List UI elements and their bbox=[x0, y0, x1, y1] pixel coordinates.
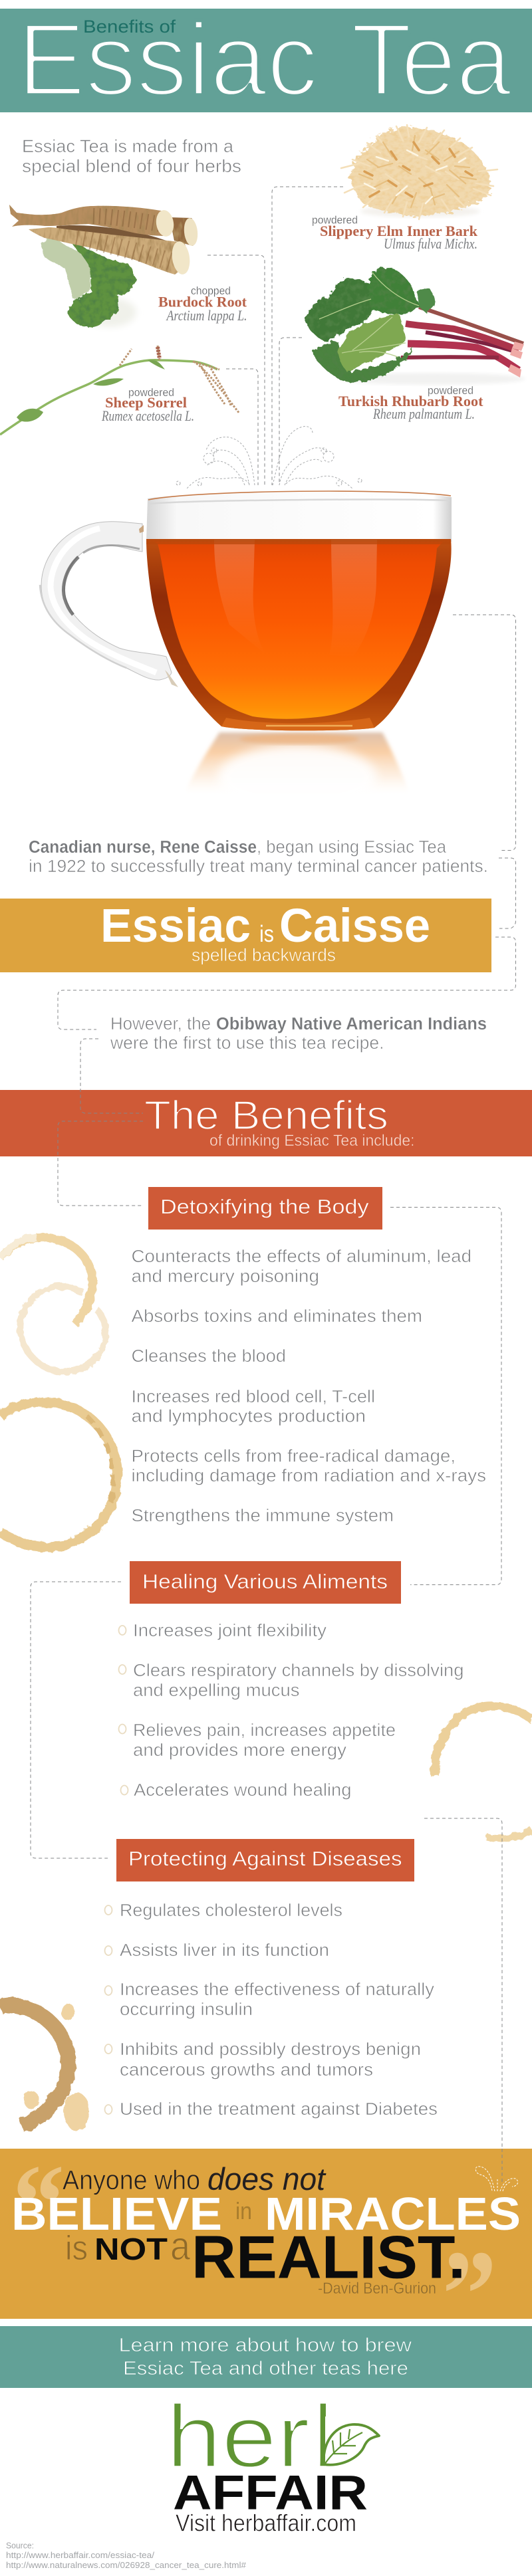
list: protecting benefits: Increases the effectiveness of naturally bbox=[120, 1981, 434, 1999]
list: protecting benefits: cancerous growths and tumors bbox=[120, 2061, 373, 2080]
icon: shredded bark pile bbox=[341, 125, 497, 219]
heading: The Benefits: The Benefits bbox=[144, 1093, 388, 1138]
logo word: herb: her bbox=[166, 2387, 310, 2486]
label: Burdock Root: Burdock Root bbox=[158, 294, 247, 310]
list: detoxifying benefits: including damage from radiation and x-rays bbox=[132, 1467, 486, 1485]
panel: learn more banner: Essiac Tea and other teas here bbox=[123, 2358, 408, 2379]
section heading: Protecting Against Diseases bbox=[116, 1839, 414, 1881]
panel: Essiac is Caisse banner bbox=[0, 899, 491, 972]
connector: protecting to quote banner bbox=[424, 1818, 502, 2184]
heading: Essiac is Caisse: Essiac bbox=[100, 900, 251, 952]
icon: sorrel stem bbox=[0, 346, 239, 435]
tea highlights bbox=[214, 540, 266, 655]
label: Slippery Elm Inner Bark: powdered bbox=[312, 214, 358, 226]
panel: The Benefits banner bbox=[0, 1090, 532, 1156]
tea body bbox=[154, 542, 443, 719]
decoration: tea ring right bbox=[435, 1706, 532, 1839]
label: Slippery Elm Inner Bark: Slippery Elm Inner Bark bbox=[320, 223, 478, 239]
section heading: Detoxifying the Body: Detoxifying the Body bbox=[160, 1195, 369, 1218]
decoration: large tea ring bbox=[0, 1402, 117, 1547]
connector: cup to nurse text bbox=[453, 615, 516, 851]
text: visit herbaffair.com: Visit herbaffair.com bbox=[176, 2510, 356, 2536]
panel: learn more banner: Learn more about how to brew bbox=[118, 2335, 412, 2356]
panel: slippery elm bbox=[312, 125, 497, 252]
list: healing benefits: and expelling mucus bbox=[133, 1681, 299, 1700]
label: Sheep Sorrel: powdered bbox=[128, 386, 174, 399]
label: Turkish Rhubarb Root: Rheum palmantum L. bbox=[372, 405, 475, 422]
text block: Rene Caisse: in 1922 to successfully treat many terminal cancer patients. bbox=[29, 857, 488, 876]
panel: burdock root bbox=[9, 205, 247, 328]
decoration: tea rings top left bbox=[0, 1237, 106, 1372]
panel: title banner bbox=[0, 2, 532, 117]
logo icon: leaf bbox=[324, 2424, 379, 2465]
list: healing benefits: Accelerates wound healing bbox=[134, 1781, 351, 1800]
list: healing benefits: Clears respiratory channels by dissolving bbox=[133, 1662, 464, 1680]
connector: gold banner to Obibway text bbox=[58, 937, 516, 1029]
list: protecting benefits: occurring insulin bbox=[120, 2000, 253, 2019]
connector lines from herbs to cup bbox=[207, 187, 343, 485]
label: Sheep Sorrel bbox=[101, 386, 194, 424]
text block: intro: special blend of four herbs bbox=[22, 156, 241, 176]
logo: herb affair bbox=[166, 2387, 379, 2536]
quote text: Anyone who bbox=[63, 2165, 200, 2195]
reflection under cup bbox=[183, 732, 411, 796]
panel: turkish rhubarb bbox=[306, 267, 525, 422]
list: detoxifying benefits: Protects cells from free-radical damage, bbox=[132, 1448, 456, 1466]
list: detoxifying benefits: Cleanses the blood bbox=[132, 1347, 286, 1366]
text block: Obibway: However, the bbox=[110, 1015, 211, 1033]
cup handle bbox=[41, 522, 172, 680]
section heading: Detoxifying the Body bbox=[148, 1187, 382, 1230]
text block: Rene Caisse bbox=[29, 838, 488, 876]
text: spelled backwards: spelled backwards bbox=[192, 945, 336, 965]
list: protecting benefits: Inhibits and possibly destroys benign bbox=[120, 2040, 421, 2059]
text block: intro: Essiac Tea is made from a bbox=[22, 136, 233, 156]
connector: nurse text to gold banner bbox=[499, 858, 516, 928]
list: healing benefits: Relieves pain, increases appetite bbox=[133, 1721, 396, 1740]
list: detoxifying benefits: Strengthens the immune system bbox=[132, 1507, 394, 1525]
quote text: is bbox=[65, 2229, 88, 2268]
glass rim bbox=[146, 492, 452, 542]
list: healing benefits bbox=[118, 1622, 464, 1800]
list: protecting benefits: Used in the treatment against Diabetes bbox=[120, 2100, 438, 2119]
section heading: Healing Various Aliments: Healing Various Aliments bbox=[142, 1570, 388, 1593]
attribution: -David Ben-Gurion bbox=[318, 2280, 436, 2298]
text block: sources: http://www.herbaffair.com/essiac-tea/ bbox=[6, 2550, 154, 2560]
label: Sheep Sorrel: Rumex acetosella L. bbox=[101, 407, 194, 424]
panel: learn more banner bbox=[0, 2326, 532, 2388]
icon: small dashed swirl bbox=[475, 2167, 518, 2191]
icon: burdock root photo bbox=[9, 205, 199, 328]
label: Burdock Root: chopped bbox=[191, 284, 231, 297]
quote text: a bbox=[170, 2224, 191, 2268]
text block: sources: http://www.naturalnews.com/026928_cancer_tea_cure.html# bbox=[6, 2560, 247, 2570]
quote text: BELIEVE bbox=[11, 2188, 222, 2240]
text block: intro bbox=[22, 136, 241, 176]
quote text: MIRACLES bbox=[265, 2188, 521, 2240]
list: protecting benefits bbox=[105, 1901, 438, 2119]
title: Essiac Tea: Tea bbox=[351, 2, 512, 117]
quote text: in bbox=[235, 2197, 252, 2224]
glass base bbox=[221, 718, 374, 730]
text block: Obibway: Obibway Native American Indians bbox=[216, 1015, 487, 1033]
list: detoxifying benefits: Increases red blood cell, T-cell bbox=[132, 1388, 375, 1406]
list: healing benefits: Increases joint flexibility bbox=[133, 1622, 327, 1640]
icon: opening quote mark: “ bbox=[13, 2143, 65, 2262]
text block: sources: Source: bbox=[6, 2540, 34, 2551]
tea outer wall bbox=[146, 539, 452, 730]
label: Turkish Rhubarb Root bbox=[338, 384, 483, 422]
icon: rhubarb stalks and leaves bbox=[306, 267, 525, 385]
list: protecting benefits: Assists liver in its function bbox=[120, 1941, 329, 1960]
quote text: NOT bbox=[94, 2232, 168, 2266]
label: Sheep Sorrel: Sheep Sorrel bbox=[105, 394, 187, 411]
logo word: herb: b bbox=[313, 2387, 362, 2486]
text block: sources bbox=[6, 2540, 247, 2570]
label: Burdock Root: Arctium lappa L. bbox=[166, 307, 247, 324]
section heading: Healing Various Aliments bbox=[130, 1561, 401, 1604]
list: detoxifying benefits bbox=[132, 1247, 486, 1525]
connector: benefits banner to detox heading bbox=[58, 1121, 143, 1206]
decoration: brown tea ring with drops bbox=[0, 2003, 89, 2131]
logo word: AFFAIR: AFFAIR bbox=[173, 2466, 368, 2520]
list: detoxifying benefits: Absorbs toxins and eliminates them bbox=[132, 1307, 422, 1326]
list: detoxifying benefits: and mercury poisoning bbox=[132, 1267, 319, 1286]
label: Turkish Rhubarb Root: powdered bbox=[428, 384, 473, 397]
text: of drinking: of drinking Essiac Tea include: bbox=[209, 1132, 415, 1150]
label: Slippery Elm Inner Bark bbox=[312, 214, 478, 252]
illustration: glass tea cup bbox=[40, 491, 452, 811]
list: protecting benefits: Regulates cholesterol levels bbox=[120, 1901, 342, 1920]
label: Burdock Root bbox=[158, 284, 247, 324]
text block: Rene Caisse: Canadian nurse, Rene Caisse bbox=[29, 838, 257, 857]
quote text: does not bbox=[207, 2161, 327, 2197]
connector end inside banner bbox=[501, 2149, 503, 2184]
text block: Obibway bbox=[110, 1015, 487, 1053]
section heading: Protecting Against Diseases: Protecting Against Diseases bbox=[128, 1847, 402, 1870]
list: healing benefits: and provides more energy bbox=[133, 1741, 346, 1760]
label: Slippery Elm Inner Bark: Ulmus fulva Michx. bbox=[384, 235, 477, 252]
label: Turkish Rhubarb Root: Turkish Rhubarb Root bbox=[338, 393, 483, 409]
panel: quote banner bbox=[0, 2143, 532, 2365]
quote text bbox=[11, 2161, 521, 2298]
quote text: REALIST. bbox=[192, 2224, 466, 2292]
panel: sheep sorrel bbox=[0, 346, 239, 435]
title: Essiac Tea: Essiac bbox=[17, 2, 318, 117]
heading: Essiac is Caisse: is bbox=[259, 921, 274, 947]
text block: Rene Caisse: , began using Essiac Tea bbox=[257, 838, 447, 857]
list: detoxifying benefits: and lymphocytes production bbox=[132, 1408, 366, 1426]
connector: healing to protecting bbox=[31, 1582, 121, 1858]
connector: detox to healing bbox=[390, 1207, 501, 1584]
icon: closing quote mark: ” bbox=[442, 2225, 497, 2365]
list: detoxifying benefits: Counteracts the effects of aluminum, lead bbox=[132, 1247, 471, 1266]
text block: Obibway: were the first to use this tea recipe. bbox=[110, 1034, 384, 1053]
heading: Essiac is Caisse: Caisse bbox=[279, 900, 430, 952]
subtitle: Benefits of: Benefits of bbox=[83, 17, 176, 37]
connector: Obibway text to benefits banner bbox=[80, 1039, 143, 1113]
icon: dashed steam swirls bbox=[176, 427, 362, 488]
